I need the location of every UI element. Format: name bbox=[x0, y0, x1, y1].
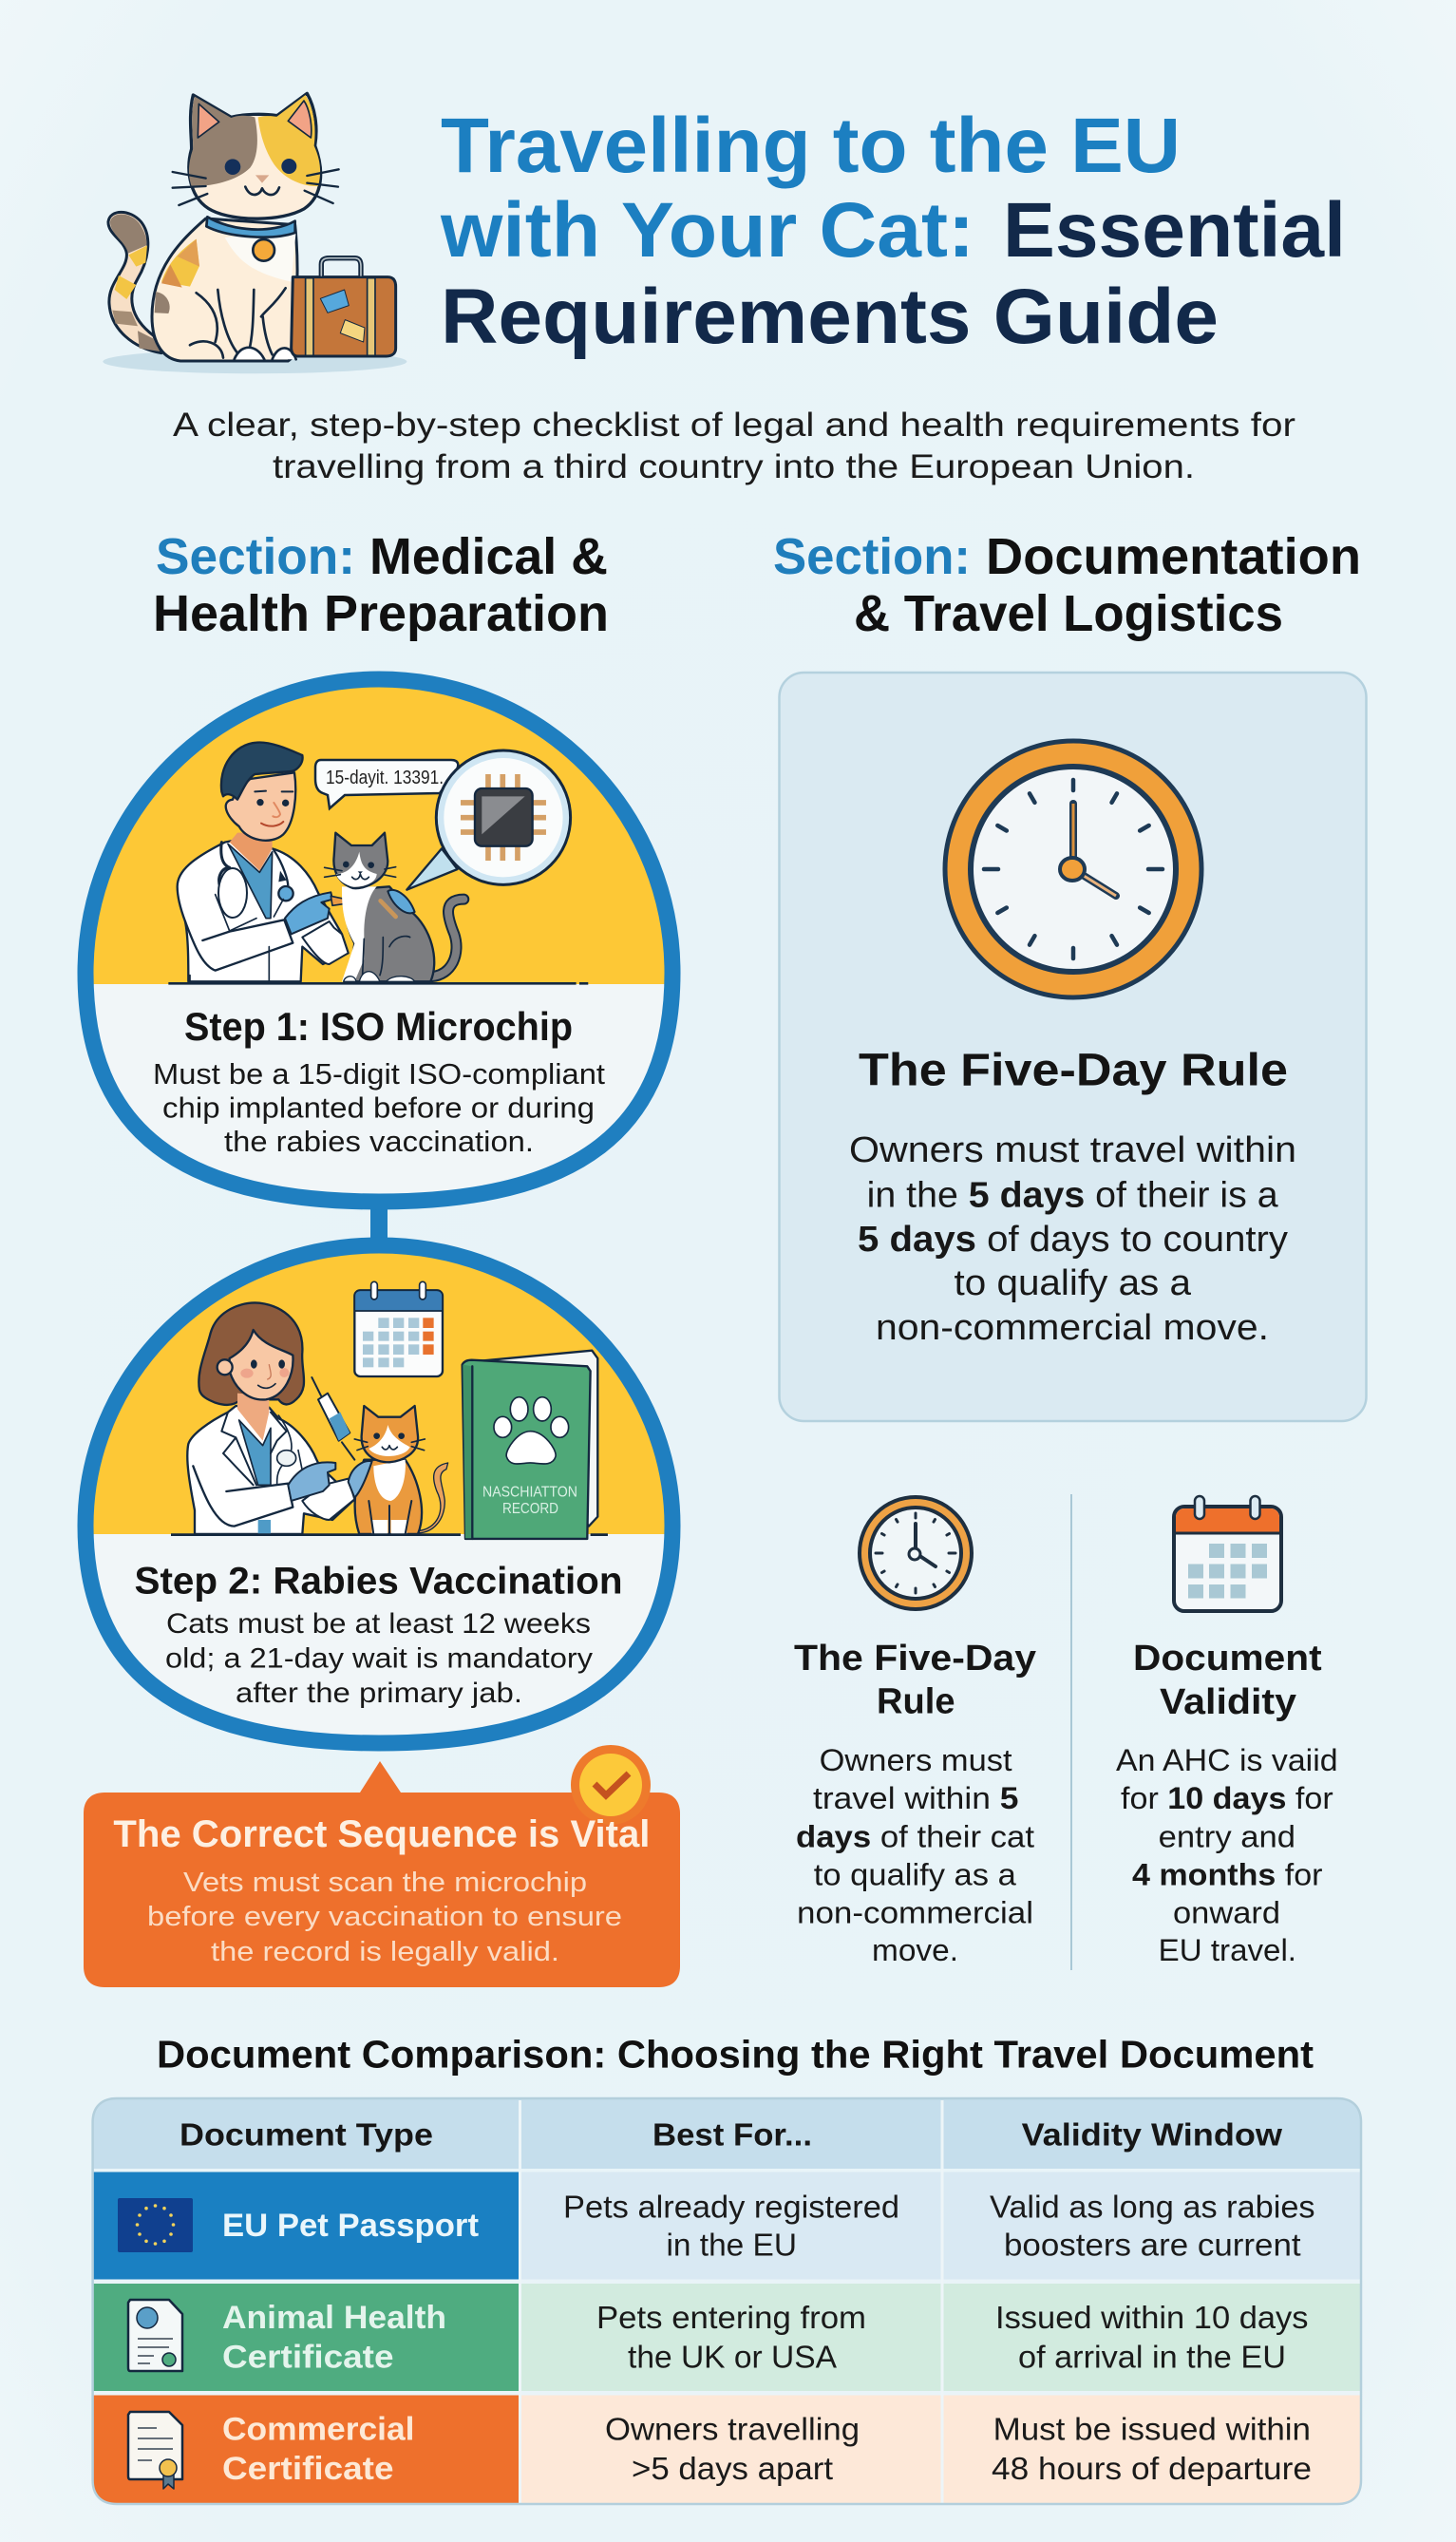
book label: vaccination record: NASCHIATTON bbox=[482, 1485, 577, 1501]
document validity text: entry and bbox=[1159, 1820, 1295, 1854]
table row: animal health certificate: of arrival in the EU bbox=[1018, 2339, 1286, 2374]
table row: animal health certificate: Animal Health bbox=[222, 2300, 446, 2336]
document validity heading: Validity bbox=[1160, 1682, 1296, 1722]
step 2 heading: Step 2: Rabies Vaccination bbox=[135, 1560, 623, 1602]
heading: medical and health preparation: Health Preparation bbox=[153, 585, 609, 642]
five-day rule text: in the 5 days of their is a bbox=[867, 1176, 1278, 1216]
document validity text bbox=[1116, 1743, 1338, 1967]
five-day rule text: non-commercial move. bbox=[876, 1308, 1269, 1348]
table row: animal health certificate: Issued within 10 days bbox=[995, 2300, 1309, 2335]
panel: step 1 ISO microchip bbox=[85, 679, 672, 1202]
column divider bbox=[1070, 1494, 1072, 1970]
five-day rule summary text bbox=[796, 1743, 1034, 1967]
step 2 text bbox=[165, 1608, 593, 1709]
table header row: Best For... bbox=[652, 2116, 812, 2153]
heading: documentation and travel logistics: & Travel Logistics bbox=[854, 585, 1283, 642]
panel: five-day rule bbox=[779, 673, 1366, 1421]
table row: commercial certificate: >5 days apart bbox=[632, 2451, 833, 2486]
table row: EU pet passport: in the EU bbox=[667, 2227, 797, 2262]
table row: commercial certificate: Owners travelling bbox=[605, 2411, 860, 2447]
five-day rule summary text: travel within 5 bbox=[813, 1781, 1018, 1815]
five-day rule summary text: to qualify as a bbox=[814, 1858, 1016, 1892]
title: Essential bbox=[1003, 187, 1346, 274]
table row: commercial certificate: 48 hours of departure bbox=[992, 2451, 1312, 2486]
step 1 text bbox=[153, 1057, 605, 1158]
table row: commercial certificate: Commercial bbox=[222, 2411, 414, 2447]
heading: medical and health preparation: Medical & bbox=[369, 528, 608, 585]
table header row bbox=[93, 2098, 1361, 2169]
callout heading: The Correct Sequence is Vital bbox=[113, 1813, 650, 1855]
callout text: the record is legally valid. bbox=[211, 1937, 559, 1967]
table row: EU pet passport: Pets already registered bbox=[563, 2189, 899, 2225]
document validity text: An AHC is vaiid bbox=[1116, 1743, 1338, 1777]
icon: calico cat with suitcase bbox=[103, 93, 407, 373]
illustration: vet vaccinating a cat bbox=[171, 1281, 608, 1539]
heading: medical and health preparation: Section: bbox=[156, 528, 355, 585]
five-day rule summary heading bbox=[794, 1639, 1036, 1722]
five-day rule text bbox=[849, 1130, 1296, 1348]
heading: documentation and travel logistics: Documentation bbox=[986, 528, 1361, 585]
step 1 text: chip implanted before or during bbox=[162, 1091, 595, 1125]
subtitle: A clear, step-by-step checklist of legal and health requirements for bbox=[173, 407, 1295, 444]
five-day rule summary heading: Rule bbox=[877, 1682, 955, 1722]
heading: documentation and travel logistics bbox=[773, 528, 1361, 642]
table header row: Document Type bbox=[180, 2116, 433, 2153]
five-day rule summary text: non-commercial bbox=[797, 1896, 1033, 1930]
icon: calendar bbox=[1174, 1496, 1281, 1611]
subtitle bbox=[173, 407, 1295, 485]
icon: magnified microchip bbox=[407, 750, 571, 890]
document validity text: onward bbox=[1173, 1896, 1280, 1930]
card: five-day rule summary bbox=[794, 1497, 1036, 1967]
illustration: vet microchipping a cat bbox=[168, 743, 588, 983]
table header row: Validity Window bbox=[1022, 2116, 1282, 2153]
step 2 text: Cats must be at least 12 weeks bbox=[166, 1608, 591, 1640]
step 1 heading: Step 1: ISO Microchip bbox=[184, 1004, 573, 1049]
title: Requirements Guide bbox=[441, 274, 1219, 360]
card: document validity bbox=[1116, 1496, 1338, 1967]
document validity text: for 10 days for bbox=[1121, 1781, 1333, 1815]
icon: check badge bbox=[571, 1745, 651, 1825]
table row: commercial certificate bbox=[93, 2396, 1361, 2504]
title: Travelling to the EU bbox=[441, 103, 1181, 189]
table: document comparison bbox=[93, 2098, 1361, 2504]
icon: commercial certificate document bbox=[128, 2412, 182, 2489]
table row: EU pet passport bbox=[93, 2172, 1361, 2280]
table row: EU pet passport: EU Pet Passport bbox=[222, 2208, 479, 2244]
table row: EU pet passport: boosters are current bbox=[1004, 2227, 1301, 2262]
callout text bbox=[147, 1868, 622, 1967]
step 2 text: old; a 21-day wait is mandatory bbox=[165, 1643, 593, 1675]
heading: document comparison: Document Comparison: Choosing the Right Travel Document bbox=[157, 2033, 1314, 2077]
speech bubble: chip number bbox=[315, 760, 458, 808]
panel: step 2 rabies vaccination bbox=[85, 1245, 672, 1743]
heading: documentation and travel logistics: Section: bbox=[773, 528, 971, 585]
step 1 text: the rabies vaccination. bbox=[224, 1125, 534, 1158]
step 2 text: after the primary jab. bbox=[236, 1678, 522, 1709]
icon: large clock bbox=[945, 741, 1201, 997]
five-day rule summary text: Owners must bbox=[820, 1743, 1012, 1777]
speech bubble: chip number: 15-dayit. 13391. bbox=[326, 768, 444, 788]
table row: animal health certificate bbox=[93, 2284, 1361, 2391]
five-day rule text: Owners must travel within bbox=[849, 1130, 1296, 1170]
icon: EU flag bbox=[118, 2198, 193, 2252]
callout text: before every vaccination to ensure bbox=[147, 1902, 622, 1932]
table row: commercial certificate: Must be issued within bbox=[993, 2411, 1311, 2447]
table row: animal health certificate: Pets entering from bbox=[596, 2300, 866, 2335]
document validity text: EU travel. bbox=[1159, 1933, 1296, 1967]
document validity text: 4 months for bbox=[1132, 1858, 1323, 1892]
icon: small clock bbox=[860, 1497, 972, 1609]
callout text: Vets must scan the microchip bbox=[183, 1868, 587, 1898]
icon: health certificate document bbox=[128, 2300, 182, 2371]
five-day rule heading: The Five-Day Rule bbox=[859, 1046, 1288, 1096]
step 1 text: Must be a 15-digit ISO-compliant bbox=[153, 1057, 605, 1091]
table row: animal health certificate: the UK or USA bbox=[628, 2339, 837, 2374]
document validity heading bbox=[1133, 1639, 1322, 1722]
five-day rule summary heading: The Five-Day bbox=[794, 1639, 1036, 1679]
five-day rule text: 5 days of days to country bbox=[858, 1220, 1288, 1260]
table row: animal health certificate: Certificate bbox=[222, 2339, 393, 2375]
document validity heading: Document bbox=[1133, 1639, 1322, 1679]
subtitle: travelling from a third country into the European Union. bbox=[273, 448, 1195, 485]
five-day rule text: to qualify as a bbox=[954, 1263, 1192, 1303]
book label: vaccination record: RECORD bbox=[502, 1501, 558, 1517]
callout: correct sequence bbox=[84, 1745, 680, 1987]
five-day rule summary text: move. bbox=[872, 1933, 958, 1967]
connector between steps bbox=[370, 1205, 388, 1244]
table row: EU pet passport: Valid as long as rabies bbox=[990, 2189, 1315, 2225]
five-day rule summary text: days of their cat bbox=[796, 1820, 1034, 1854]
book label: vaccination record bbox=[482, 1485, 577, 1517]
heading: medical and health preparation bbox=[153, 528, 609, 642]
title: with Your Cat: bbox=[440, 187, 974, 274]
table row: commercial certificate: Certificate bbox=[222, 2451, 393, 2487]
title bbox=[440, 103, 1346, 360]
